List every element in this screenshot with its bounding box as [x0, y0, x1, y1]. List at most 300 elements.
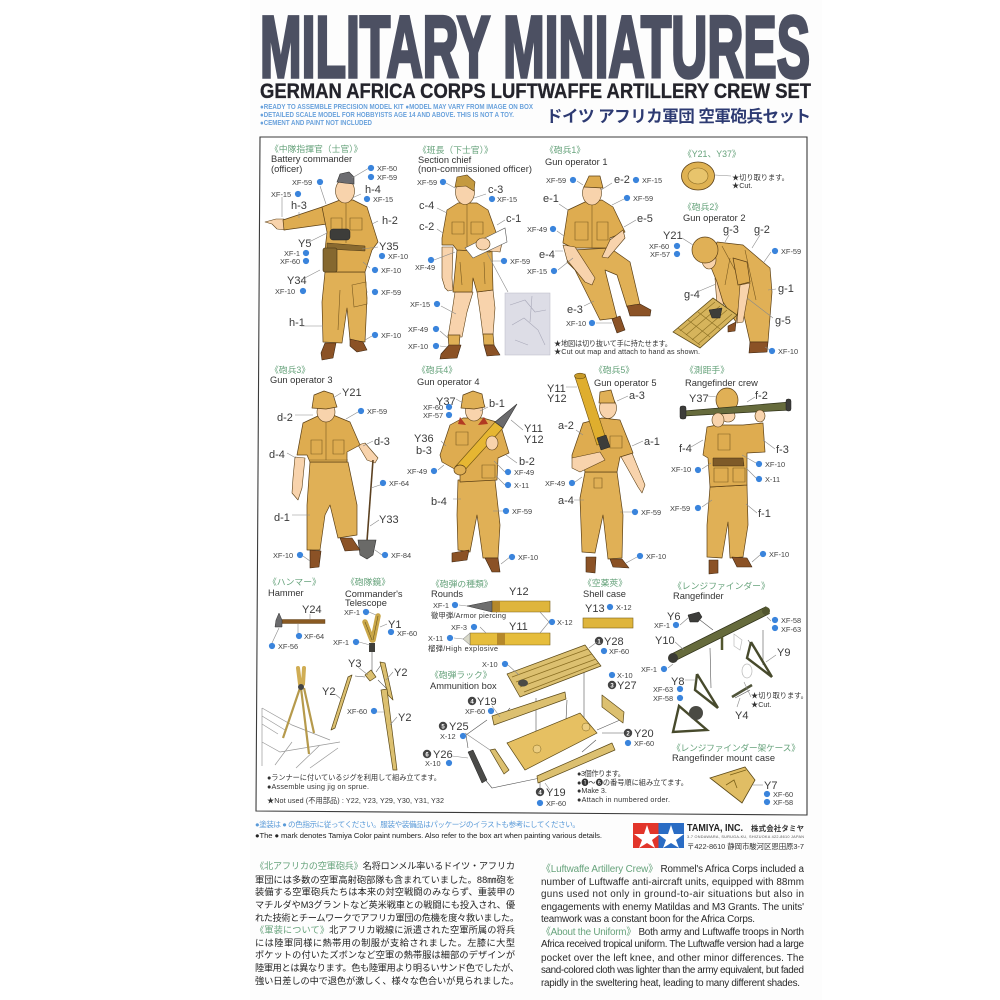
- panel: rangefinder mount case: [672, 742, 800, 807]
- part label: Y13: [585, 603, 605, 615]
- heading: rangefinder mount case: [672, 742, 800, 763]
- paint codes: XF-10: [765, 460, 785, 469]
- paint codes: XF-60: [649, 242, 669, 251]
- heading: commander's telescope: Telescope: [345, 598, 387, 608]
- assembled tripod on sprue: [262, 668, 340, 768]
- part labels: Y2: [394, 667, 407, 679]
- panel: gun operator 2: [649, 201, 801, 356]
- text block: English description: sand-colored cloth was lighter than the army equivalent, but faded: [541, 965, 804, 976]
- cut note: [715, 173, 789, 190]
- heading: gun operator 5: [594, 364, 657, 388]
- heading: rangefinder mount case: 《レンジファインダー架ケース》: [672, 742, 800, 753]
- paint codes: X-11: [765, 475, 780, 484]
- round type captions: [428, 611, 506, 653]
- panel: gun operator 1: [527, 144, 700, 356]
- numbered part labels: Y26: [433, 749, 453, 761]
- mount case part: [710, 767, 755, 803]
- paint codes: XF-49: [527, 225, 547, 234]
- leader lines: [335, 612, 397, 725]
- paint codes: X-10: [482, 660, 498, 669]
- paint codes: [641, 616, 801, 703]
- heading: shell case: 《空薬莢》: [583, 577, 627, 588]
- text block: Japanese description: 軍団には多数の空軍高射砲部隊も含まれていました。88㎜砲を: [255, 874, 515, 885]
- panel: ammunition box: [423, 636, 688, 808]
- paint codes: XF-63: [653, 685, 673, 694]
- part labels: b-1: [489, 398, 505, 410]
- paint codes: [407, 403, 538, 562]
- part labels: [414, 396, 544, 508]
- paint codes: [428, 601, 573, 643]
- panel: instruction frame: [256, 137, 807, 815]
- paint codes: XF-10: [388, 252, 408, 261]
- text block: Japanese description: マチルダやM3グラントなど英米戦車との戦闘にも投入され、優: [255, 899, 515, 910]
- text block: English description: pocket over the left knee, and other minor differences. The: [541, 953, 804, 964]
- heading: section chief: [418, 144, 532, 174]
- paint codes: X-11: [428, 634, 443, 643]
- part labels: [322, 619, 411, 724]
- part labels: Y35: [379, 241, 399, 253]
- exploded rangefinder parts: [668, 607, 772, 732]
- map note: [554, 339, 700, 356]
- paint codes: XF-59: [381, 288, 401, 297]
- numbered part labels: 2: [626, 731, 630, 737]
- paint codes: XF-60: [634, 739, 654, 748]
- heading: rangefinder crew: Rangefinder crew: [685, 378, 758, 388]
- heading: hammer: Hammer: [268, 588, 304, 598]
- text block: Japanese description: 《軍装について》北アフリカ戦線に派遣された空軍所属の将兵: [255, 924, 515, 935]
- paint codes: XF-63: [781, 625, 801, 634]
- part labels: f-2: [755, 390, 768, 402]
- paint codes: XF-15: [527, 267, 547, 276]
- numbered part labels: 6: [425, 752, 429, 758]
- assembly notes: [577, 769, 688, 804]
- part labels: f-4: [679, 443, 692, 455]
- paint codes: XF-57: [423, 411, 443, 420]
- part labels: [269, 387, 399, 526]
- part labels: d-3: [374, 436, 390, 448]
- armor piercing shell: [467, 601, 550, 612]
- leader line: [753, 784, 763, 786]
- paint codes: XF-49: [407, 467, 427, 476]
- paint codes: XF-15: [410, 300, 430, 309]
- part labels: Y36: [414, 433, 434, 445]
- heading: shell case: Shell case: [583, 589, 626, 599]
- high explosive shell: [463, 633, 550, 645]
- cut note: ★Cut.: [732, 181, 752, 190]
- paint codes: XF-59: [292, 178, 312, 187]
- numbered part labels: [423, 636, 654, 799]
- figure: gun operator 5: [572, 373, 645, 573]
- numbered part labels: 3: [610, 683, 614, 689]
- paint codes: X-10: [617, 671, 633, 680]
- part labels: Y11: [547, 383, 566, 395]
- heading: section chief: 《班長（下士官）》: [418, 144, 493, 155]
- part labels: b-3: [416, 445, 432, 457]
- heading: section chief: (non-commissioned officer): [418, 164, 532, 174]
- numbered part labels: Y27: [617, 680, 637, 692]
- part labels: [539, 174, 653, 316]
- heading: hammer: 《ハンマー》: [268, 577, 321, 587]
- part labels: d-4: [269, 449, 285, 461]
- paint codes: XF-3: [451, 623, 467, 632]
- paint codes: XF-50: [377, 164, 397, 173]
- paint codes: XF-49: [408, 325, 428, 334]
- paint codes: XF-10: [381, 331, 401, 340]
- paint codes: [425, 647, 654, 808]
- part label: Y7: [764, 780, 777, 792]
- part labels: Y8: [671, 676, 684, 688]
- company details: 株式会社タミヤ: [751, 824, 804, 833]
- text block: English description: engagements with enemy Matildas and M3 Grants. The units': [541, 902, 804, 913]
- part labels: Y1: [388, 619, 401, 631]
- part labels: e-1: [543, 193, 559, 205]
- paint codes: [273, 407, 411, 560]
- part labels: Y2: [398, 712, 411, 724]
- part labels: a-3: [629, 390, 645, 402]
- paint codes: XF-1: [654, 621, 670, 630]
- part labels: c-4: [419, 200, 434, 212]
- part labels: b-2: [519, 456, 535, 468]
- part labels: Y9: [777, 647, 790, 659]
- part labels: h-2: [382, 215, 398, 227]
- map note: ★地図は切り抜いて手に持たせます。: [554, 339, 672, 348]
- heading: battery commander: [270, 143, 362, 174]
- heading: gun operator 1: [545, 144, 608, 167]
- figure: section chief: [440, 175, 507, 359]
- text block: English description: number of Luftwaffe anti-aircraft units, equipped with 88mm: [541, 877, 804, 888]
- logo: Tamiya stars: [633, 823, 684, 848]
- paint codes: [269, 632, 324, 651]
- text block: English description: guns used not only in ground-to-air situations but also in: [541, 889, 804, 900]
- paint code: X-12: [616, 603, 632, 612]
- paint codes: XF-10: [646, 552, 666, 561]
- assembly notes: ●Attach in numbered order.: [577, 795, 670, 804]
- part labels: Y21: [342, 387, 362, 399]
- paint codes: XF-60: [423, 403, 443, 412]
- heading: commander's telescope: 《砲隊鏡》: [346, 576, 390, 587]
- numbered part labels: Y19: [477, 696, 497, 708]
- paint codes: XF-59: [512, 507, 532, 516]
- paint codes: X-12: [440, 732, 456, 741]
- kit notes in blue: [260, 104, 533, 127]
- heading: gun operator 2: [683, 201, 746, 223]
- paint codes: [408, 178, 530, 351]
- heading: gun operator 5: 《砲兵5》: [594, 364, 634, 375]
- paint codes: XF-15: [497, 195, 517, 204]
- paint codes: [764, 790, 793, 807]
- part labels: Y37: [689, 393, 709, 405]
- part labels: Y11: [524, 423, 543, 435]
- paint codes: XF-49: [514, 468, 534, 477]
- paint codes: XF-60: [546, 799, 566, 808]
- heading: Y21 Y37: 《Y21、Y37》: [683, 149, 741, 159]
- assembly notes: ●ランナーに付いているジグを利用して組み立てます。: [267, 773, 441, 782]
- paint codes: XF-64: [389, 479, 409, 488]
- paint codes: XF-59: [377, 173, 397, 182]
- figure: gun operator 4: [440, 391, 517, 572]
- paint codes: XF-56: [278, 642, 298, 651]
- part labels: h-4: [365, 184, 381, 196]
- cut note: ★切り取ります。: [751, 691, 808, 700]
- figure: battery commander: [265, 172, 378, 360]
- paint codes: XF-10: [381, 266, 401, 275]
- paint codes: XF-1: [433, 601, 449, 610]
- kit notes in blue: ●CEMENT AND PAINT NOT INCLUDED: [260, 120, 372, 127]
- part labels: f-1: [758, 508, 771, 520]
- text block: Japanese description: [255, 860, 519, 986]
- figure: gun operator 2: [673, 237, 772, 353]
- heading: battery commander: (officer): [271, 164, 302, 174]
- leader lines: [287, 393, 383, 561]
- paint codes: XF-60: [609, 647, 629, 656]
- part labels: Y37: [436, 396, 456, 408]
- paint codes: XF-60: [397, 629, 417, 638]
- heading: battery commander: 《中隊指揮官（士官）》: [270, 143, 362, 154]
- part labels: d-2: [277, 412, 293, 424]
- part labels: Y6: [667, 611, 680, 623]
- leader lines: [668, 617, 776, 707]
- subtitle: GERMAN AFRICA CORPS LUFTWAFFE ARTILLERY CREW SET: [260, 80, 811, 103]
- panel: helmet parts Y21 Y37: [682, 149, 789, 190]
- part labels: g-3: [723, 224, 739, 236]
- part labels: [287, 184, 399, 329]
- paint codes: [333, 608, 417, 716]
- part labels: Y34: [287, 275, 307, 287]
- part labels: Y21: [663, 230, 683, 242]
- numbered part labels: 4: [470, 699, 474, 705]
- Japanese title: ドイツ アフリカ軍団 空軍砲兵セット: [546, 107, 811, 126]
- heading: rangefinder mount case: Rangefinder mount case: [672, 753, 775, 763]
- part label: Y24: [302, 604, 322, 616]
- numbered part labels: Y28: [604, 636, 624, 648]
- paint codes: XF-58: [653, 694, 673, 703]
- part labels: [655, 611, 790, 722]
- paint note: ●The ● mark denotes Tamiya Color paint numbers. Also refer to the box art when painting various details.: [255, 831, 602, 840]
- paint codes: XF-1: [344, 608, 360, 617]
- leader lines: [691, 396, 775, 562]
- paint codes: XF-10: [671, 465, 691, 474]
- part labels: g-2: [754, 224, 770, 236]
- text block: Japanese description: ポケットの付いたズボンなど空軍の熱帯服は細部のデザインが: [255, 949, 515, 960]
- part labels: Y5: [298, 238, 311, 250]
- heading: gun operator 3: 《砲兵3》: [270, 364, 310, 375]
- figure: gun operator 1: [563, 176, 651, 333]
- part labels: Y2: [322, 686, 335, 698]
- panel: section chief: [408, 144, 550, 359]
- heading: rangefinder: 《レンジファインダー》: [673, 580, 770, 591]
- part labels: f-3: [776, 444, 789, 456]
- figure: rangefinder crew: [680, 388, 791, 574]
- part labels: Y12: [547, 393, 567, 405]
- leader lines: [434, 183, 508, 347]
- paint codes: XF-10: [769, 550, 789, 559]
- paint codes: XF-59: [633, 194, 653, 203]
- heading: rounds: Rounds: [431, 589, 463, 599]
- heading: rangefinder crew: 《測距手》: [685, 364, 729, 375]
- paint codes: XF-60: [465, 707, 485, 716]
- numbered part labels: Y19: [546, 787, 566, 799]
- text block: Japanese description: 陸軍用とは異なります。色も陸軍用より明るいサンド色でしたが、: [255, 962, 519, 973]
- paint codes: XF-59: [367, 407, 387, 416]
- text block: Japanese description: 《北アフリカの空軍砲兵》名将ロンメル率いるドイツ・アフリカ: [255, 860, 515, 871]
- part labels: h-3: [291, 200, 307, 212]
- assembly notes: ●❶～❻の番号順に組み立てます。: [577, 778, 688, 787]
- paint codes: XF-10: [408, 342, 428, 351]
- part labels: [547, 383, 660, 507]
- heading: rounds: 《砲弾の種類》: [431, 578, 493, 589]
- panel: rangefinder crew: [670, 364, 791, 574]
- heading: rounds: [431, 578, 493, 599]
- heading: gun operator 2: Gun operator 2: [683, 213, 746, 223]
- part labels: c-3: [488, 184, 503, 196]
- paint codes: XF-59: [641, 508, 661, 517]
- company details: TAMIYA, INC.: [687, 822, 743, 834]
- heading: gun operator 3: [270, 364, 333, 385]
- numbered part labels: Y20: [634, 728, 654, 740]
- paint codes: [670, 460, 789, 559]
- text block: English description: 《Luftwaffe Artillery Crew》 Rommel's Africa Corps included a: [541, 863, 804, 875]
- paint codes: XF-1: [641, 665, 657, 674]
- paint codes: XF-15: [373, 195, 393, 204]
- heading: battery commander: Battery commander: [271, 154, 352, 164]
- cut note: ★Cut.: [751, 700, 771, 709]
- text block: English description: 《About the Uniform》 Both army and Luftwaffe troops in North: [541, 926, 804, 938]
- assembly notes: [267, 773, 444, 805]
- heading: gun operator 3: Gun operator 3: [270, 375, 333, 385]
- text block: Japanese description: れた技術とチームワークでアフリカ軍団の危機を度々救いました。: [255, 912, 519, 923]
- paint codes: XF-1: [333, 638, 349, 647]
- part labels: Y3: [348, 658, 361, 670]
- part labels: c-1: [506, 213, 521, 225]
- heading: commander's telescope: Commander's: [345, 589, 403, 599]
- text block: Japanese description: 強い日差しの中で退色が激しく、様々な色合いが見られました。: [255, 975, 519, 986]
- part labels: Y12: [524, 434, 544, 446]
- part labels: Y33: [379, 514, 399, 526]
- paint codes: [649, 242, 801, 356]
- leader lines: [452, 642, 597, 790]
- exploded ammunition box: [466, 645, 630, 788]
- part labels: [419, 184, 521, 233]
- part labels: Y10: [655, 635, 675, 647]
- company details: 〒422-8610 静岡市駿河区恩田原3-7: [687, 842, 804, 851]
- paint codes: XF-1: [284, 249, 300, 258]
- part labels: e-5: [637, 213, 653, 225]
- panel: battery commander: [265, 143, 408, 360]
- heading: gun operator 2: 《砲兵2》: [683, 201, 723, 212]
- paint codes: X-11: [514, 481, 529, 490]
- part labels: g-1: [778, 283, 794, 295]
- paint codes: XF-59: [417, 178, 437, 187]
- panel: rangefinder: [641, 580, 808, 732]
- part labels: d-1: [274, 512, 290, 524]
- text block: English description: teamwork was a constant boon for the Africa Corps.: [541, 914, 755, 925]
- paint codes: X-10: [425, 759, 441, 768]
- assembly notes: ●3個作ります。: [577, 769, 625, 778]
- paint codes: XF-15: [642, 176, 662, 185]
- paint codes: XF-10: [778, 347, 798, 356]
- paint codes: XF-58: [773, 798, 793, 807]
- heading: ammunition box: Ammunition box: [430, 681, 497, 691]
- heading: gun operator 1: 《砲兵1》: [545, 144, 585, 155]
- heading: rangefinder crew: [685, 364, 758, 388]
- heading: gun operator 4: [417, 364, 480, 387]
- heading: ammunition box: [430, 669, 497, 691]
- paint codes: XF-49: [545, 479, 565, 488]
- kit notes in blue: ●READY TO ASSEMBLE PRECISION MODEL KIT ●MODEL MAY VARY FROM IMAGE ON BOX: [260, 104, 533, 111]
- panel: shell case: [583, 577, 633, 628]
- heading: gun operator 4: Gun operator 4: [417, 377, 480, 387]
- leader lines: [454, 605, 549, 639]
- heading: ammunition box: 《砲弾ラック》: [430, 669, 492, 680]
- company details: 3-7 ONDAWARA, SURUGA-KU, SHIZUOKA 422-8610 JAPAN: [687, 835, 804, 839]
- part labels: Y4: [735, 710, 748, 722]
- paint codes: XF-84: [391, 551, 411, 560]
- text block: Japanese description: には陸軍同様に熱帯用の制服が支給されました。左膝に大型: [255, 937, 515, 948]
- map note: ★Cut out map and attach to hand as shown.: [554, 347, 700, 356]
- part labels: Y12: [509, 586, 529, 598]
- text block: English description: rapidly in the sweltering heat, leading to many different shades.: [541, 978, 800, 989]
- cut-out map: [505, 293, 550, 355]
- part labels: b-4: [431, 496, 447, 508]
- kit notes in blue: ●DETAILED SCALE MODEL FOR HOBBYISTS AGE 14 AND ABOVE. THIS IS NOT A TOY.: [260, 112, 514, 119]
- panel: hammer: [268, 577, 325, 651]
- part labels: c-2: [419, 221, 434, 233]
- paint codes: XF-59: [781, 247, 801, 256]
- leader lines: [282, 168, 378, 340]
- heading: rangefinder: Rangefinder: [673, 591, 724, 601]
- paint codes: [545, 479, 666, 561]
- heading: gun operator 1: Gun operator 1: [545, 157, 608, 167]
- part labels: [679, 390, 789, 520]
- exploded telescope parts: [331, 616, 397, 770]
- leader lines: [272, 614, 310, 643]
- paint codes: [527, 176, 662, 328]
- paint codes: XF-60: [347, 707, 367, 716]
- paint codes: XF-64: [304, 632, 324, 641]
- paint codes: XF-10: [566, 319, 586, 328]
- cut note: ★切り取ります。: [732, 173, 789, 182]
- text block: English description: [541, 863, 804, 989]
- paint note: [255, 819, 602, 840]
- paint codes: XF-59: [510, 257, 530, 266]
- part labels: a-4: [558, 495, 574, 507]
- heading: gun operator 5: Gun operator 5: [594, 378, 657, 388]
- paint codes: XF-60: [773, 790, 793, 799]
- icon: hammer: [275, 613, 325, 627]
- heading: hammer: [268, 577, 321, 598]
- leader lines: [566, 387, 643, 563]
- part labels: g-4: [684, 289, 700, 301]
- paint codes: XF-49: [415, 263, 435, 272]
- round type captions: 徹甲弾/Armor piercing: [431, 611, 506, 620]
- figure: gun operator 3: [292, 391, 378, 568]
- heading: rangefinder: [673, 580, 770, 601]
- paint codes: XF-59: [670, 504, 690, 513]
- paint codes: [271, 164, 408, 340]
- part labels: Y11: [509, 621, 528, 633]
- paint codes: XF-59: [546, 176, 566, 185]
- paint codes: XF-10: [518, 553, 538, 562]
- part labels: e-4: [539, 249, 555, 261]
- paint codes: XF-60: [280, 257, 300, 266]
- panel: commander's telescope: [262, 576, 444, 805]
- paint codes: XF-58: [781, 616, 801, 625]
- part labels: e-2: [614, 174, 630, 186]
- heading: gun operator 4: 《砲兵4》: [417, 364, 457, 375]
- leader lines: [438, 399, 523, 564]
- round type captions: 榴弾/High explosive: [428, 644, 498, 653]
- panel: gun operator 5: [545, 364, 666, 573]
